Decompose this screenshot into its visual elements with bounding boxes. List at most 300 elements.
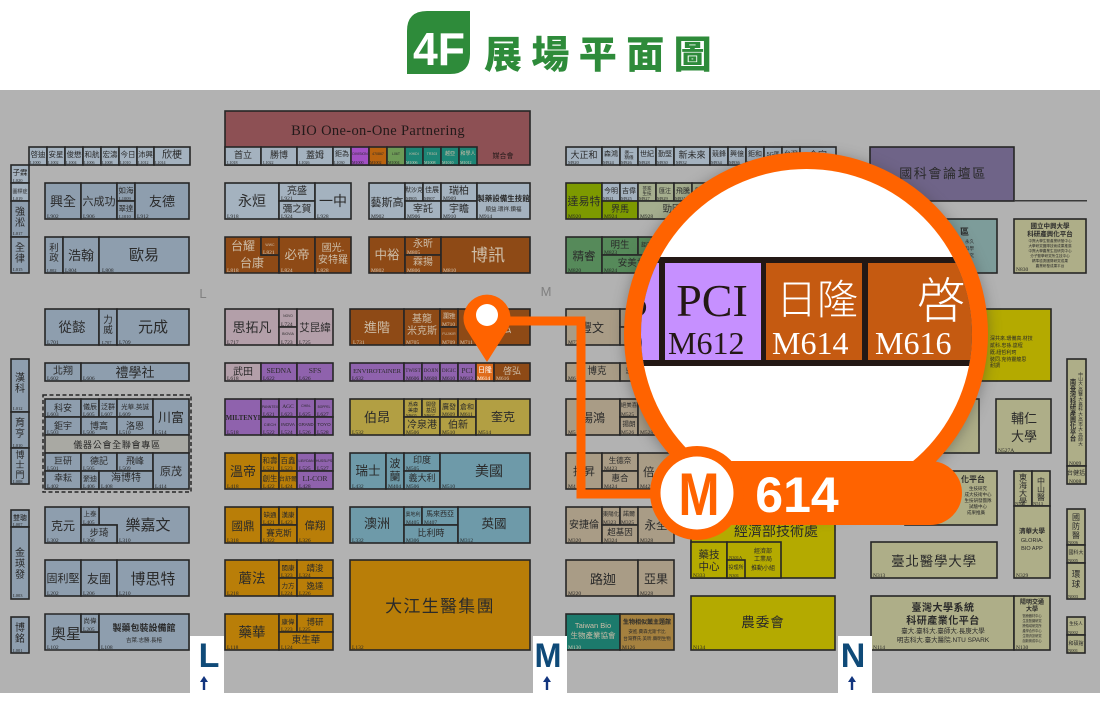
section: mustard, orange and teal rows: 溫帝	[230, 464, 256, 479]
section: column L left wall: 博	[15, 449, 25, 460]
section: central rows 9 and 8: 佳展	[425, 185, 439, 194]
section: column L rows: 浩翰	[68, 248, 94, 263]
section: column N: N130	[1016, 645, 1028, 651]
section: column M-right lower: 超基因	[607, 527, 633, 537]
section: column L top row: L1000	[30, 160, 40, 165]
section: brown rows: 進階	[364, 320, 390, 335]
section: brown rows: 弘	[500, 322, 512, 335]
section: column N: 化平台	[961, 474, 985, 484]
section: 儀器公會全聯會專區 (dashed zone): 儀器公會全聯會專區	[73, 439, 161, 450]
section: column M-right lower: M424	[604, 484, 617, 490]
section: column M-right lower: M4	[568, 484, 576, 490]
section: column N: 生技研發團隊	[964, 497, 992, 504]
section: column M-right lower: 揚鴻	[581, 411, 605, 425]
section: BIO One-on-One Partnering: L06T	[392, 152, 401, 156]
section: column M-right lower: M324	[604, 538, 617, 544]
section: pink and purple booths: M608	[424, 376, 437, 382]
section: lower central rows: 英國	[481, 516, 507, 531]
section: BIO One-on-One Partnering: KHIDI	[409, 152, 419, 156]
section: column L rows: 從懿	[58, 320, 86, 335]
section: column M-right top: M927	[639, 196, 651, 201]
section: brown rows: M802	[371, 268, 384, 274]
section: column L lower rows	[45, 507, 189, 651]
section: column L lower rows: L306	[83, 538, 95, 544]
section: mustard, orange and teal rows: M514	[478, 430, 491, 436]
section: column N	[691, 147, 1087, 653]
section: pink and purple booths: L725	[299, 340, 311, 346]
section: column N: N503	[1015, 501, 1026, 506]
section: column N: 醫	[1072, 531, 1080, 540]
section: column L left wall: 士	[15, 459, 25, 470]
section: lower central rows: L423	[281, 520, 293, 526]
section: central rows 9 and 8	[225, 183, 530, 220]
section: column L rows: L902	[47, 214, 59, 220]
section: mustard, orange and teal rows: L432	[352, 484, 364, 490]
section: column N: 中山大.高醫大.嘉科大.高市大.高師大	[1078, 371, 1084, 447]
section: brown rows: WWC	[265, 243, 275, 247]
section: column M-right lower: 博克	[587, 365, 607, 377]
section: mustard, orange and teal rows: 義大利	[408, 472, 436, 483]
section: column N: 生技人	[1069, 620, 1083, 627]
section: column M-right lower: M731	[568, 340, 581, 346]
section: 儀器公會全聯會專區 (dashed zone): L501	[47, 466, 59, 472]
section: pink and purple booths: MILTENYI	[226, 415, 261, 422]
section: column L rows: 興全	[50, 194, 76, 209]
booth M616 啓	[868, 263, 978, 361]
section: column M-right top: M920	[568, 214, 581, 220]
section: column N: 既.紐哲利珂	[990, 349, 1016, 356]
section: mustard, orange and teal rows: 爲森	[408, 401, 418, 408]
aisle tab: N	[838, 636, 872, 693]
section: mustard, orange and teal rows: 開發	[426, 401, 436, 408]
section: column M-right lower: M220	[568, 591, 581, 597]
section: pink and purple booths: DIGIC	[442, 369, 457, 374]
section: pink and purple booths: CHIN-	[301, 404, 312, 408]
section: column L lower rows: 步琦	[89, 528, 109, 539]
section: column L lower rows: 吉萊.志勝.長榕	[126, 636, 163, 644]
section: column L top row: L1006	[84, 160, 94, 165]
section: BIO One-on-One Partnering: 470867	[372, 152, 384, 156]
section: column N: 輔仁	[1011, 411, 1037, 426]
section: pink and purple booths: CIECH	[264, 422, 276, 427]
section: lower central rows: 東生華	[292, 634, 321, 646]
section: column L left wall: 雙聰	[13, 513, 27, 522]
section: lower central rows: L225	[299, 627, 311, 633]
section: column M-right top	[566, 147, 836, 274]
section: column N: 分子醫學研究所生技中心	[1030, 253, 1070, 258]
section: mustard, orange and teal rows: 廣發	[442, 402, 456, 411]
section: column L lower rows: 上泰	[84, 509, 97, 518]
section: column M-right top: M936	[729, 160, 741, 165]
section: column N: 生技醫藥研究	[1022, 618, 1042, 623]
section: column M-right top: 吉偉	[622, 186, 636, 195]
section: column M-right top: 匯注	[659, 187, 671, 195]
section: lower central rows: 澳洲	[364, 516, 390, 531]
section: column N: N513	[1033, 501, 1044, 506]
section: column L left wall: L008	[13, 479, 23, 484]
section: column M-right top: M924	[603, 160, 615, 165]
section: pink and purple booths: 啓弘	[503, 365, 521, 376]
booth M612 PCI	[665, 263, 761, 361]
section: column N: N002	[1068, 630, 1078, 635]
section: column M-right top: M929	[657, 196, 669, 201]
section: column M-right lower: M525	[621, 412, 634, 418]
section: brown rows: M805	[407, 250, 420, 256]
section: column N: 試驗中心	[969, 503, 987, 510]
section: brown rows: FUJIKIR	[442, 332, 456, 336]
section: 儀器公會全聯會專區 (dashed zone): 泛群	[101, 402, 115, 411]
section: column L top row: 沛興	[138, 149, 153, 159]
section: BIO One-on-One Partnering: 首立	[234, 149, 252, 160]
section: column M-right lower: M423	[604, 466, 617, 472]
section: column N: N301	[729, 573, 739, 578]
section: 儀器公會全聯會專區 (dashed zone): 德記	[90, 455, 108, 466]
section: column M-right lower: 惠合	[611, 473, 629, 483]
section: column L lower rows: L302	[47, 538, 59, 544]
section: column L left wall: 金	[15, 546, 25, 559]
section: pink and purple booths: NOVO	[283, 314, 293, 318]
section: lower central rows	[225, 507, 530, 651]
section: column M-right top: 台灣	[784, 149, 798, 158]
section: mustard, orange and teal rows: 創生	[262, 473, 278, 483]
section: column L rows: L808	[102, 268, 114, 274]
section: lower central rows: 漢康	[282, 510, 295, 519]
section: column L rows: 翠達	[118, 203, 134, 213]
section: brown rows: M705	[406, 340, 419, 346]
section: pink and purple booths: L522	[263, 430, 275, 436]
section: column L left wall: L015	[13, 267, 23, 272]
section: column M-right lower: M428	[640, 484, 653, 490]
section: column M-right lower: 絕美喜	[621, 401, 638, 409]
section: column M-right lower: 生德奈	[609, 455, 632, 465]
section: lower central rows: L132	[352, 645, 364, 651]
section: column L top row: 宏濤	[102, 149, 118, 159]
booth M614 日隆: M614	[772, 325, 848, 361]
section: column N: 科學	[965, 245, 974, 252]
section: column L rows: L804	[65, 268, 77, 274]
section: column L rows: 利	[49, 242, 59, 254]
magnified booth strip: S	[623, 275, 649, 327]
section: lower central rows: 馬來西亞	[426, 510, 454, 518]
section: column N: 成大技術中心	[964, 491, 992, 498]
section: column L top row: L1002	[48, 160, 58, 165]
section: column L left wall: 子霖	[12, 168, 28, 177]
section: column L lower rows: 奧星	[51, 626, 81, 643]
section: mustard, orange and teal rows: 奎克	[491, 409, 515, 424]
section: column L rows	[45, 183, 189, 382]
section: column M-right lower: M526	[621, 430, 634, 436]
section: column N: 產學合作中心	[1022, 628, 1042, 633]
section: column N: N313	[873, 573, 885, 579]
section: BIO One-on-One Partnering: M1000	[352, 160, 364, 165]
section: brown rows: 中裕	[374, 247, 400, 262]
section: central rows 9 and 8: M905	[406, 196, 418, 201]
section: column M-right top: 競鋒	[712, 149, 726, 158]
section: column L lower rows: 尚偉	[84, 616, 97, 625]
booth number banner: M	[678, 461, 720, 528]
section: pink and purple booths: INOVA	[281, 422, 295, 427]
section: column M-right lower: 豐文	[580, 320, 604, 335]
section: pink and purple booths: L526	[299, 430, 311, 436]
section: column L left wall: 全	[15, 242, 25, 254]
section: pink and purple booths: PANNTEX	[262, 405, 279, 409]
section: column L left wall: L007	[13, 522, 23, 527]
section: mustard, orange and teal rows: 美康	[408, 407, 418, 414]
section: pink and purple booths: L723	[281, 340, 293, 346]
section: column N: 創新育成中心	[1022, 638, 1042, 643]
section: mustard, orange and teal rows: 瑞士	[355, 464, 381, 478]
section: 儀器公會全聯會專區 (dashed zone): L406	[83, 484, 95, 490]
section: pink and purple booths: L724	[281, 322, 293, 328]
section: 儀器公會全聯會專區 (dashed zone): L509	[119, 466, 131, 472]
section: brown rows: L731	[353, 340, 365, 346]
section: pink and purple booths: L518	[227, 430, 239, 436]
section: mustard, orange and teal rows: M611	[460, 412, 473, 418]
section: brown rows: L821	[263, 250, 275, 256]
section: column N: 科研產業化平台	[906, 614, 980, 627]
section: column L left wall: 銘	[15, 632, 25, 645]
icon: 4F floor badge: 4F	[413, 23, 465, 75]
section: column N: 深共來.環備高.材技	[990, 335, 1033, 342]
magnifier ring	[624, 152, 988, 516]
section: mustard, orange and teal rows: M404	[388, 484, 401, 490]
section: column L rows: L906	[83, 214, 95, 220]
section: lower central rows: 藥華	[238, 625, 266, 640]
section: mustard, orange and teal rows: L424	[281, 484, 293, 490]
section: column M-right top: 金字	[809, 149, 827, 160]
section: column L top row: L1004	[66, 160, 76, 165]
section: column L left wall: L001	[13, 648, 22, 653]
section: column L left wall: 律	[15, 252, 25, 265]
section: column M-right lower: 生物相似藥主題館	[623, 618, 671, 626]
section: lower central rows: M405	[406, 520, 419, 526]
section: mustard, orange and teal rows: L523	[281, 466, 293, 472]
section: column L lower rows: L310	[119, 538, 131, 544]
aisle tab: L	[190, 636, 224, 693]
section: column L lower rows: 友圍	[87, 572, 111, 586]
section: column M-right top: 生技	[642, 190, 652, 197]
section: pink and purple booths: L627	[317, 412, 329, 418]
section: column M-right lower: M528	[640, 430, 653, 436]
section: column N: 臺灣大學系統	[912, 601, 974, 614]
section: central rows 9 and 8: 宰託	[413, 202, 433, 215]
section: mustard, orange and teal rows: HUSSLPS	[316, 459, 333, 463]
section: 儀器公會全聯會專區 (dashed zone): L408	[101, 484, 113, 490]
section: column L lower rows: 克元	[51, 519, 75, 533]
section: column N: 裝同.克待靈龍思	[990, 356, 1026, 363]
section: brown rows: 台耀	[231, 238, 255, 253]
section: lower central rows: 國鼎	[232, 520, 254, 533]
section: column N: 大學	[1011, 429, 1037, 444]
section: lower central rows: 比利時	[417, 527, 445, 538]
section: column N: 經濟部	[754, 547, 772, 555]
section: 儀器公會全聯會專區 (dashed zone): 洛恩	[126, 420, 144, 431]
section: column L rows: 如海	[118, 185, 134, 195]
section: column N: 工業局	[754, 555, 772, 563]
section: column M-right lower: 亞果	[644, 572, 668, 586]
section: column N: 藥技	[698, 548, 720, 561]
heading text: 展場平面圖	[484, 35, 721, 77]
section: column L lower rows: 固利堅	[46, 572, 80, 585]
section: column L top row: L1012	[138, 160, 148, 165]
aisle labels: L	[199, 286, 207, 301]
section: column M-right lower: M325	[621, 520, 634, 526]
section: column L rows: L606	[83, 376, 95, 382]
section: lower central rows: L421	[263, 520, 275, 526]
aisle labels: M	[541, 284, 551, 299]
section: BIO One-on-One Partnering: DIVISION	[352, 152, 368, 156]
section: column M-right top: 長佳	[694, 186, 708, 195]
aisle tab: M	[533, 636, 567, 693]
section: 儀器公會全聯會專區 (dashed zone): L505	[83, 466, 95, 472]
section: column N: 大學研究團隊技術成果推廣	[1028, 243, 1072, 248]
section: column L lower rows: 製藥包裝設備館	[112, 622, 176, 633]
section: column L lower rows: 博思特	[130, 571, 176, 588]
section: pink and purple booths: M614	[477, 376, 490, 382]
section: column N: N005	[1068, 558, 1079, 563]
section: pink and purple booths: L626	[299, 376, 311, 382]
section: mustard, orange and teal rows: L525	[299, 466, 311, 472]
section: central rows 9 and 8: M907	[424, 196, 436, 201]
section: 儀器公會全聯會專區 (dashed zone): 飛峰	[126, 456, 144, 466]
section: column N: 中心	[698, 560, 720, 573]
section: mustard, orange and teal rows: LIBYDAN	[299, 459, 314, 463]
section: column M-right lower: 東陽化	[603, 510, 620, 518]
section: column L rows: L802	[47, 268, 56, 273]
section: BIO One-on-One Partnering: 勝博	[270, 149, 288, 160]
section: column N: 科研產興化平台	[1027, 229, 1073, 238]
section: column N: 大學	[1026, 605, 1038, 613]
section: brown rows: M711	[460, 340, 473, 346]
section: column L lower rows: L102	[47, 645, 59, 651]
section: pink and purple booths: M606	[406, 376, 419, 382]
section: mustard, orange and teal rows: M505	[406, 466, 419, 472]
section: BIO One-on-One Partnering: L1022	[263, 160, 273, 165]
section: column M-right top: M931	[675, 196, 686, 201]
section: lower central rows: 靖浚	[306, 563, 324, 573]
section: 儀器公會全聯會專區 (dashed zone): L414	[155, 484, 167, 490]
section: lower central rows: 賽克斯	[266, 528, 292, 538]
section: column L left wall: 瑛	[15, 557, 25, 570]
section: mustard, orange and teal rows: L527	[317, 466, 329, 472]
section: column L lower rows: 樂嘉文	[125, 517, 171, 534]
section: column M-right lower: M6	[568, 376, 576, 382]
section: 儀器公會全聯會專區 (dashed zone): 海博特	[111, 471, 141, 484]
section: mustard, orange and teal rows: LI-COR	[302, 474, 328, 483]
section: column M-right top: M824	[604, 268, 617, 274]
section: central rows 9 and 8: L918	[227, 214, 239, 220]
section: column N: 台健括	[1067, 469, 1085, 477]
section: mustard, orange and teal rows: L428	[299, 484, 311, 490]
section: mustard, orange and teal rows: M506	[406, 484, 419, 490]
section: mustard, orange and teal rows: L422	[263, 484, 275, 490]
section: column L left wall: L019	[13, 196, 23, 201]
section: column N: 農業研發成果平台	[1036, 263, 1065, 268]
section: column L rows: 威	[103, 324, 113, 336]
section: column M-right lower: M328	[640, 538, 653, 544]
section: central rows 9 and 8: M910	[443, 214, 456, 220]
section: column N: 環	[1072, 569, 1081, 579]
section: lower central rows: L218	[227, 591, 239, 597]
section: lower central rows: 奧地利	[405, 511, 421, 518]
section: column N: N333	[693, 573, 705, 579]
section: column N: 中興大學農業生技研究中心	[1028, 248, 1072, 253]
section: column M-right top: 世紀	[640, 149, 654, 158]
section: BIO One-on-One Partnering: BIO One-on-One Partnering	[291, 123, 465, 139]
section: pink and purple booths: L524	[281, 430, 293, 436]
section: 儀器公會全聯會專區 (dashed zone): L503	[47, 430, 59, 436]
section: column M-right lower: 路迦	[590, 572, 616, 587]
section: BIO One-on-One Partnering: 和學人	[460, 150, 476, 157]
section: 儀器公會全聯會專區 (dashed zone): 川富	[158, 410, 184, 425]
section: 儀器公會全聯會專區 (dashed zone): L603	[47, 412, 59, 418]
section: 儀器公會全聯會專區 (dashed zone): 縈迪	[83, 474, 97, 483]
section: column N: BIO APP	[1021, 546, 1043, 552]
section: BIO One-on-One Partnering: L1018	[227, 160, 237, 165]
section: column L top row: 安星	[48, 149, 64, 159]
section: column M-right top: 鉅和	[748, 149, 762, 158]
section: column L top row: 俊懋	[66, 149, 82, 159]
section: brown rows: L824	[281, 268, 293, 274]
section: column L left wall: 漢	[15, 371, 25, 384]
section: brown rows: L828	[317, 268, 329, 274]
section: column M-right lower: 恩	[626, 367, 632, 375]
section: BIO One-on-One Partnering: M1004	[388, 160, 400, 165]
section: column L lower rows: L210	[119, 591, 131, 597]
section: central rows 9 and 8: M909	[443, 196, 456, 202]
section: column L left wall: 圖標症	[12, 188, 28, 195]
section: pink and purple booths: M616	[496, 376, 509, 382]
section: 儀器公會全聯會專區 (dashed zone): 幸耘	[54, 473, 72, 483]
section: column M-right lower: M228	[640, 591, 653, 597]
section: column M-right top: 5G匯	[767, 151, 780, 158]
section: column N: 貳科.忠孫.崑程	[990, 342, 1023, 349]
section: column M-right top: M920	[568, 160, 580, 165]
section: column M-right top: M928	[639, 160, 651, 165]
booth M614 日隆: 日隆	[776, 277, 858, 323]
section: column M-right lower: M5	[568, 430, 576, 436]
section: 儀器公會全聯會專區 (dashed zone): L609	[119, 412, 131, 418]
section: column M-right lower: M130	[568, 645, 581, 651]
section: column L rows: L1010	[119, 214, 131, 219]
section: 儀器公會全聯會專區 (dashed zone)	[43, 395, 191, 492]
section: column N: 成果推廣	[967, 509, 985, 516]
section: column M-right top: 飛騰	[676, 186, 690, 195]
section: central rows 9 and 8: 默沙克	[405, 186, 423, 194]
section: mustard, orange and teal rows: 和壽	[262, 455, 278, 465]
section: lower central rows: 康偉	[282, 617, 295, 626]
section: BIO One-on-One Partnering: TR303	[427, 152, 437, 156]
section: brown rows: 霖揚	[413, 255, 433, 268]
section: column L left wall: 淞	[15, 216, 25, 229]
section: mustard, orange and teal rows: 倉和	[460, 402, 474, 411]
section: lower central rows: L332	[352, 538, 364, 544]
section: central rows 9 and 8: M906	[407, 214, 420, 220]
section: central rows 9 and 8: L924	[281, 214, 293, 220]
section: mustard, orange and teal rows: 台舒爾	[279, 475, 297, 483]
section: column N: 臺北醫學大學	[891, 554, 977, 569]
section: column M-right top: 今明	[604, 186, 618, 195]
section: column N: N006	[1068, 540, 1079, 545]
section: column L rows: L707	[102, 340, 112, 345]
section: mustard, orange and teal rows: M510	[442, 430, 455, 436]
section: column N: 耐調	[990, 362, 1000, 369]
section: column M-right lower: 諾爾	[623, 510, 635, 518]
section: column M-right top: M925	[621, 196, 633, 201]
section: 儀器公會全聯會專區 (dashed zone): L605	[83, 412, 95, 418]
section: central rows 9 and 8: 一中	[319, 193, 347, 209]
section: lower central rows: L224	[281, 591, 293, 597]
